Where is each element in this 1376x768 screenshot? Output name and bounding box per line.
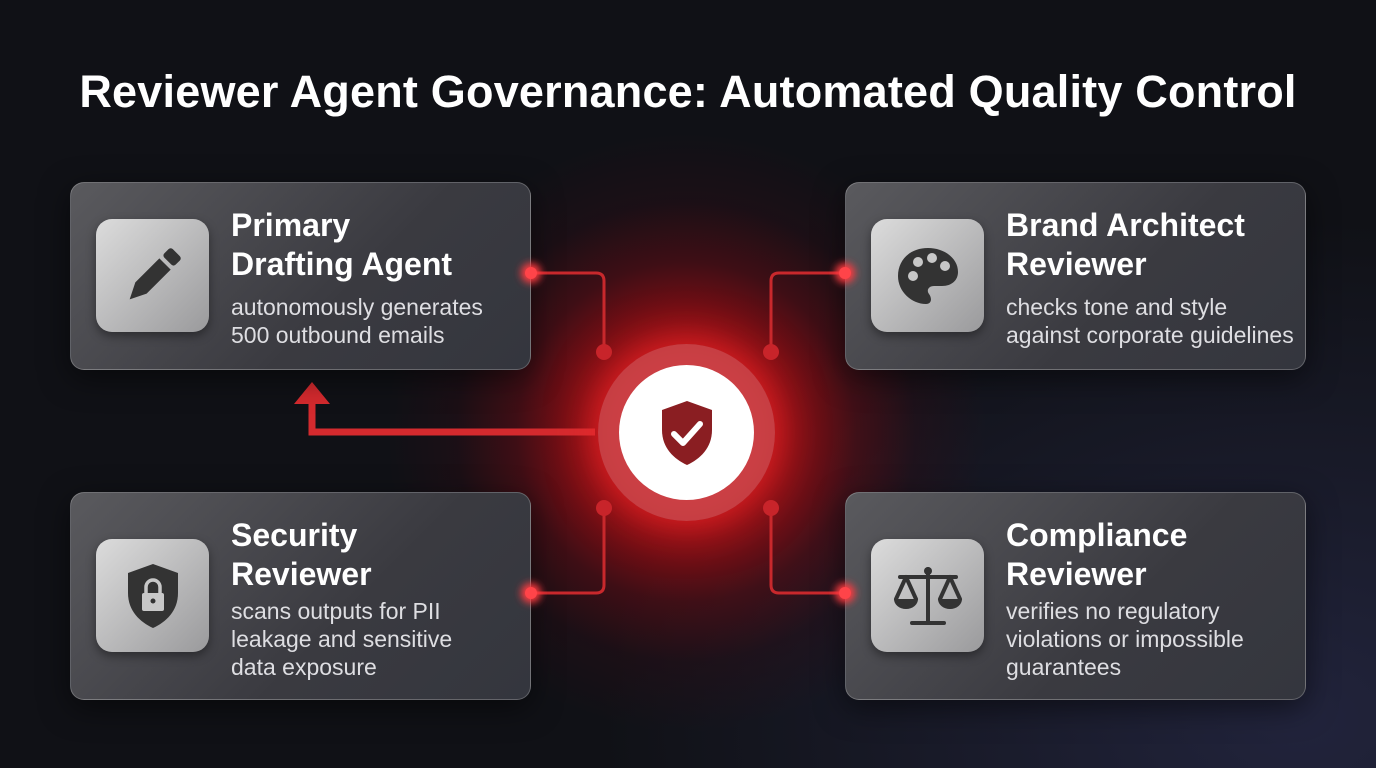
panel: compliance reviewer: Compliance [1006, 517, 1187, 553]
hub: shield check [598, 344, 775, 521]
panel: security reviewer [70, 492, 531, 700]
panel: security reviewer: leakage and sensitive [231, 626, 452, 652]
panel: compliance reviewer: verifies no regulatory [1006, 598, 1220, 624]
panel: primary drafting agent: Primary [231, 207, 350, 243]
arrow: back to drafting agent [294, 382, 595, 436]
panel: compliance reviewer [845, 492, 1306, 700]
panel: compliance reviewer: Reviewer [1006, 556, 1147, 592]
panel: compliance reviewer: guarantees [1006, 654, 1121, 680]
icon: lock shield [96, 539, 209, 652]
panel: security reviewer: scans outputs for PII [231, 598, 441, 624]
panel: brand architect reviewer: Brand Architect [1006, 207, 1245, 243]
icon: scales [871, 539, 984, 652]
panel: brand architect reviewer: Reviewer [1006, 246, 1147, 282]
panel: primary drafting agent: Drafting Agent [231, 246, 452, 282]
panel: brand architect reviewer: against corporate guidelines [1006, 322, 1294, 348]
title: Reviewer Agent Governance: Automated Quality Control [79, 66, 1297, 117]
panel: primary drafting agent: autonomously generates [231, 294, 483, 320]
panel: security reviewer: Security [231, 517, 357, 553]
panel: compliance reviewer: violations or impossible [1006, 626, 1244, 652]
icon: pencil [96, 219, 209, 332]
panel: security reviewer: data exposure [231, 654, 377, 680]
panel: primary drafting agent: 500 outbound emails [231, 322, 445, 348]
icon: palette [871, 219, 984, 332]
panel: brand architect reviewer: checks tone and style [1006, 294, 1227, 320]
panel: primary drafting agent [70, 182, 531, 370]
panel: security reviewer: Reviewer [231, 556, 372, 592]
panel: brand architect reviewer [845, 182, 1306, 370]
